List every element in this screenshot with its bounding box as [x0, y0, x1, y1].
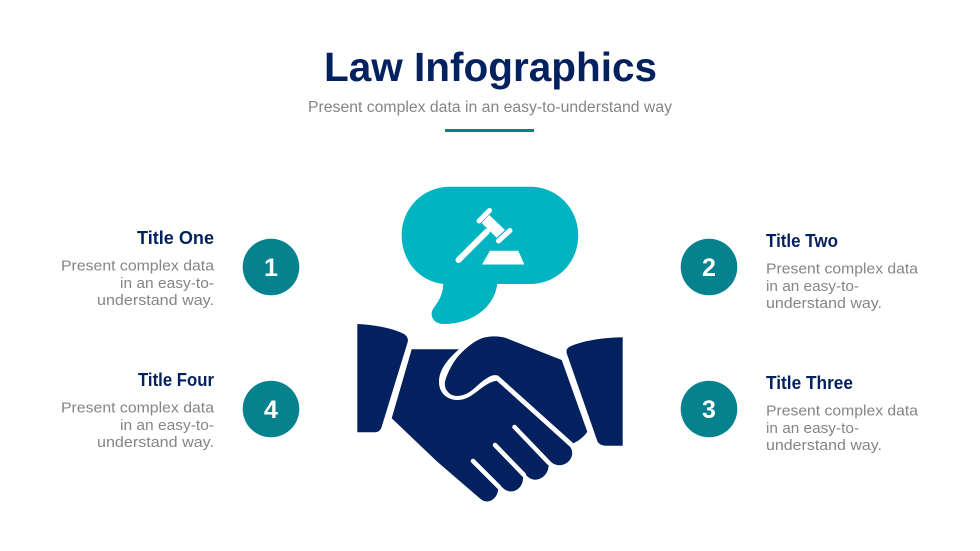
- item 4 text: understand way.: [97, 434, 214, 451]
- item 3 text: [766, 373, 919, 454]
- item 3 text: Title Three: [766, 373, 853, 393]
- item 2 text: Present complex data: [766, 260, 919, 278]
- badge 1: 1: [264, 254, 278, 282]
- item 1 text: in an easy-to-: [120, 275, 214, 292]
- speech bubble: [402, 187, 578, 324]
- lower hand with fingers: [392, 349, 572, 501]
- item 1 text: Present complex data: [61, 258, 215, 274]
- item 4 text: in an easy-to-: [120, 417, 214, 434]
- badge 4: [243, 381, 299, 437]
- icon: speech bubble with gavel: [402, 187, 578, 324]
- badge 3: 3: [702, 396, 716, 424]
- item 4 text: Present complex data: [61, 400, 215, 416]
- subtitle: Present complex data in an easy-to-understand way: [308, 99, 672, 116]
- badge 2: [681, 239, 737, 295]
- item 2 text: [766, 231, 919, 312]
- item 1 text: Title One: [137, 228, 214, 248]
- right cuff: [566, 337, 623, 446]
- badge 3: [681, 381, 737, 437]
- icon: gavel: [458, 210, 524, 264]
- left cuff: [357, 324, 408, 432]
- icon: handshake: [357, 324, 623, 501]
- item 2 text: Title Two: [766, 231, 838, 251]
- title underline accent: [445, 129, 534, 132]
- badge 4: 4: [264, 396, 278, 424]
- finger gaps: [473, 427, 549, 487]
- badge 2: 2: [702, 254, 716, 282]
- item 2 text: in an easy-to-: [766, 278, 859, 295]
- item 4 text: Title Four: [138, 370, 214, 390]
- item 3 text: understand way.: [766, 437, 882, 454]
- item 1 text: understand way.: [97, 292, 214, 309]
- item 1 text: [61, 228, 215, 309]
- item 3 text: Present complex data: [766, 402, 919, 420]
- item 4 text: [61, 370, 215, 451]
- title: Law Infographics: [324, 44, 657, 90]
- item 3 text: in an easy-to-: [766, 420, 859, 437]
- badge 1: [243, 239, 299, 295]
- item 2 text: understand way.: [766, 295, 882, 312]
- upper hand: [445, 336, 587, 443]
